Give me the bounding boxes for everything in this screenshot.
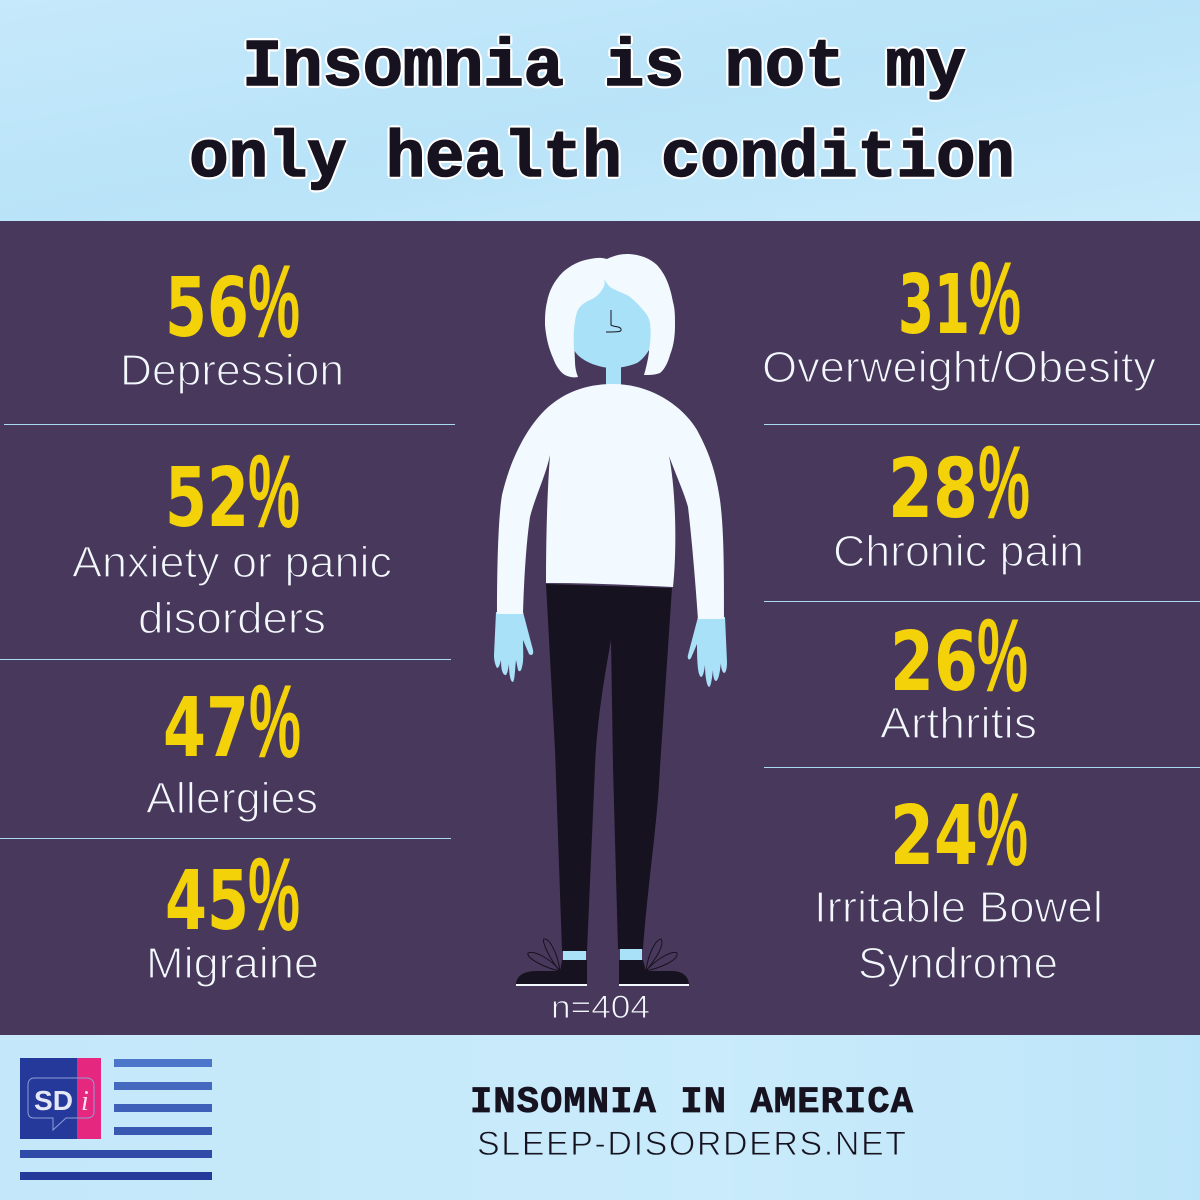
stat: 45% Migraine: 45 — [165, 854, 249, 949]
stat: 52% Anxiety or panic disorders: % — [248, 434, 300, 550]
stat: 28% Chronic pain: % — [978, 425, 1030, 541]
sweater — [497, 384, 724, 619]
stat: 31% Overweight/Obesity: 31 — [898, 258, 970, 353]
stat: 47% Allergies: 47 — [163, 681, 249, 776]
stat: 24% Irritable Bowel Syndrome: % — [977, 772, 1028, 888]
leaves at feet — [528, 939, 677, 971]
stat: 45% Migraine: Migraine — [146, 939, 319, 988]
stat: 26% Arthritis: Arthritis — [880, 699, 1037, 748]
stat: 56% Depression: % — [248, 244, 300, 360]
shoe soles — [516, 984, 689, 986]
pants — [546, 584, 672, 951]
neck — [606, 360, 621, 386]
stat: 31% Overweight/Obesity — [762, 241, 1156, 392]
footer website: SLEEP-DISORDERS.NET — [477, 1125, 906, 1163]
stat: 26% Arthritis: % — [977, 598, 1028, 714]
stat: 56% Depression: 56 — [165, 261, 249, 356]
logo: SDI flag: i — [81, 1086, 89, 1117]
stat: 26% Arthritis: 26 — [890, 615, 978, 710]
stat: 56% Depression — [120, 244, 344, 395]
stat: 56% Depression: Depression — [120, 346, 344, 395]
stat: 24% Irritable Bowel Syndrome: 24 — [890, 789, 978, 884]
stat: 31% Overweight/Obesity: % — [969, 241, 1021, 357]
right shoe — [619, 960, 689, 985]
stat: 47% Allergies: Allergies — [146, 774, 318, 823]
logo: SDI flag: SD — [34, 1085, 73, 1116]
stat: 24% Irritable Bowel Syndrome: Irritable Bowel — [814, 883, 1103, 932]
footer background — [0, 1035, 1200, 1200]
stat: 45% Migraine — [146, 837, 319, 988]
right hand — [688, 617, 727, 687]
logo: SDI flag — [20, 1058, 212, 1180]
stat: 28% Chronic pain: Chronic pain — [833, 527, 1084, 576]
face — [574, 279, 651, 368]
left hand — [494, 612, 533, 682]
stat: 31% Overweight/Obesity: Overweight/Obesity — [762, 343, 1156, 392]
header background — [0, 0, 1200, 221]
socks — [563, 951, 586, 960]
stat: 52% Anxiety or panic disorders: Anxiety or panic — [72, 538, 392, 587]
stat: 28% Chronic pain: 28 — [888, 442, 978, 537]
stat: 28% Chronic pain — [833, 425, 1084, 576]
stat: 52% Anxiety or panic disorders: disorders — [138, 594, 326, 643]
stat: 47% Allergies: % — [249, 664, 301, 780]
stat: 52% Anxiety or panic disorders: 52 — [165, 451, 249, 546]
figure: person illustration — [494, 254, 727, 985]
title: only health condition — [189, 121, 1015, 196]
title: Insomnia is not my — [242, 30, 966, 106]
nose — [606, 310, 621, 332]
stat: 45% Migraine: % — [248, 837, 300, 953]
title — [189, 30, 1015, 196]
hair — [545, 254, 675, 377]
stat: 52% Anxiety or panic disorders — [72, 434, 392, 643]
left shoe — [516, 960, 587, 985]
stat: 24% Irritable Bowel Syndrome: Syndrome — [858, 939, 1058, 988]
panel: purple main band — [0, 221, 1200, 1035]
footer heading: INSOMNIA IN AMERICA — [470, 1082, 914, 1124]
stat: 47% Allergies — [146, 664, 318, 823]
sample size note: n=404 — [551, 989, 650, 1025]
stat: 26% Arthritis — [880, 598, 1037, 748]
stat: 24% Irritable Bowel Syndrome — [814, 772, 1103, 988]
